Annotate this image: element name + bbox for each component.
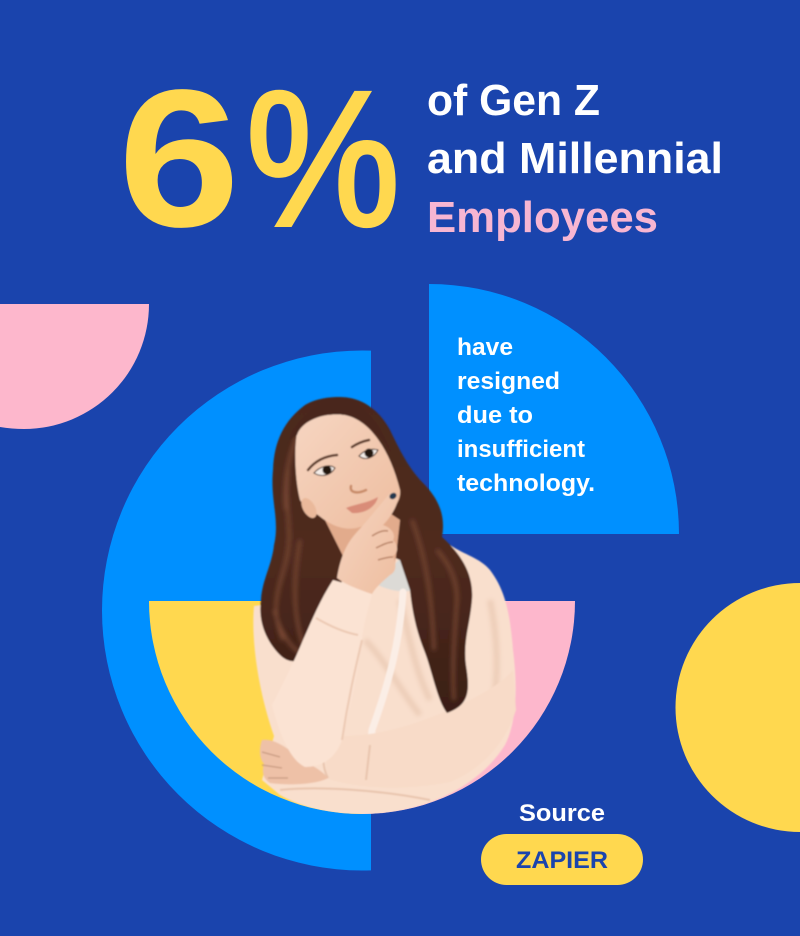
big percentage: 6%: 6 xyxy=(118,49,240,268)
hair highlights xyxy=(274,430,457,700)
big percentage: 6% xyxy=(118,49,400,268)
shape: pink quarter circle xyxy=(362,601,575,814)
text block: have resigned due to insufficient technology: resigned xyxy=(457,368,560,395)
sweater xyxy=(253,545,516,814)
drawstring xyxy=(368,588,407,734)
shape: pink half circle left xyxy=(0,304,149,429)
source label: Source xyxy=(519,800,605,827)
source pill: ZAPIER: ZAPIER xyxy=(516,847,608,874)
eye right xyxy=(359,449,378,458)
lips xyxy=(346,497,378,513)
ear xyxy=(300,498,318,520)
shape: yellow quarter circle xyxy=(149,601,362,814)
text block: have resigned due to insufficient technology: technology. xyxy=(457,470,595,497)
hairline front xyxy=(293,414,343,437)
photo: thinking woman xyxy=(253,397,516,814)
text block: have resigned due to insufficient technology xyxy=(457,334,595,497)
shape: yellow circle right xyxy=(676,583,800,832)
text block: have resigned due to insufficient technology: have xyxy=(457,334,513,361)
nail xyxy=(388,491,398,501)
text block: have resigned due to insufficient technology: due to xyxy=(457,402,533,429)
face xyxy=(295,414,400,529)
hair xyxy=(260,397,472,713)
sweater shading xyxy=(365,600,497,720)
shape: blue quarter circle panel xyxy=(429,284,679,534)
heading: of Gen Z and Millennial Employees: of Gen Z xyxy=(427,76,600,125)
hand lower xyxy=(260,740,328,784)
neck xyxy=(324,514,401,562)
hood xyxy=(379,560,410,592)
heading: of Gen Z and Millennial Employees: Employees xyxy=(427,193,658,242)
source pill: ZAPIER xyxy=(481,834,643,885)
eyebrows xyxy=(308,440,369,470)
raised sleeve xyxy=(288,578,342,768)
big percentage: 6%: % xyxy=(246,51,400,266)
nose xyxy=(351,486,366,492)
hand and finger xyxy=(337,492,398,594)
heading: of Gen Z and Millennial Employees: and Millennial xyxy=(427,134,723,183)
text block: have resigned due to insufficient technology: insufficient xyxy=(457,436,585,463)
forearm folds xyxy=(364,685,516,784)
shape: big blue half circle xyxy=(102,350,371,870)
eye left xyxy=(314,466,335,475)
heading: of Gen Z and Millennial Employees xyxy=(427,76,723,242)
